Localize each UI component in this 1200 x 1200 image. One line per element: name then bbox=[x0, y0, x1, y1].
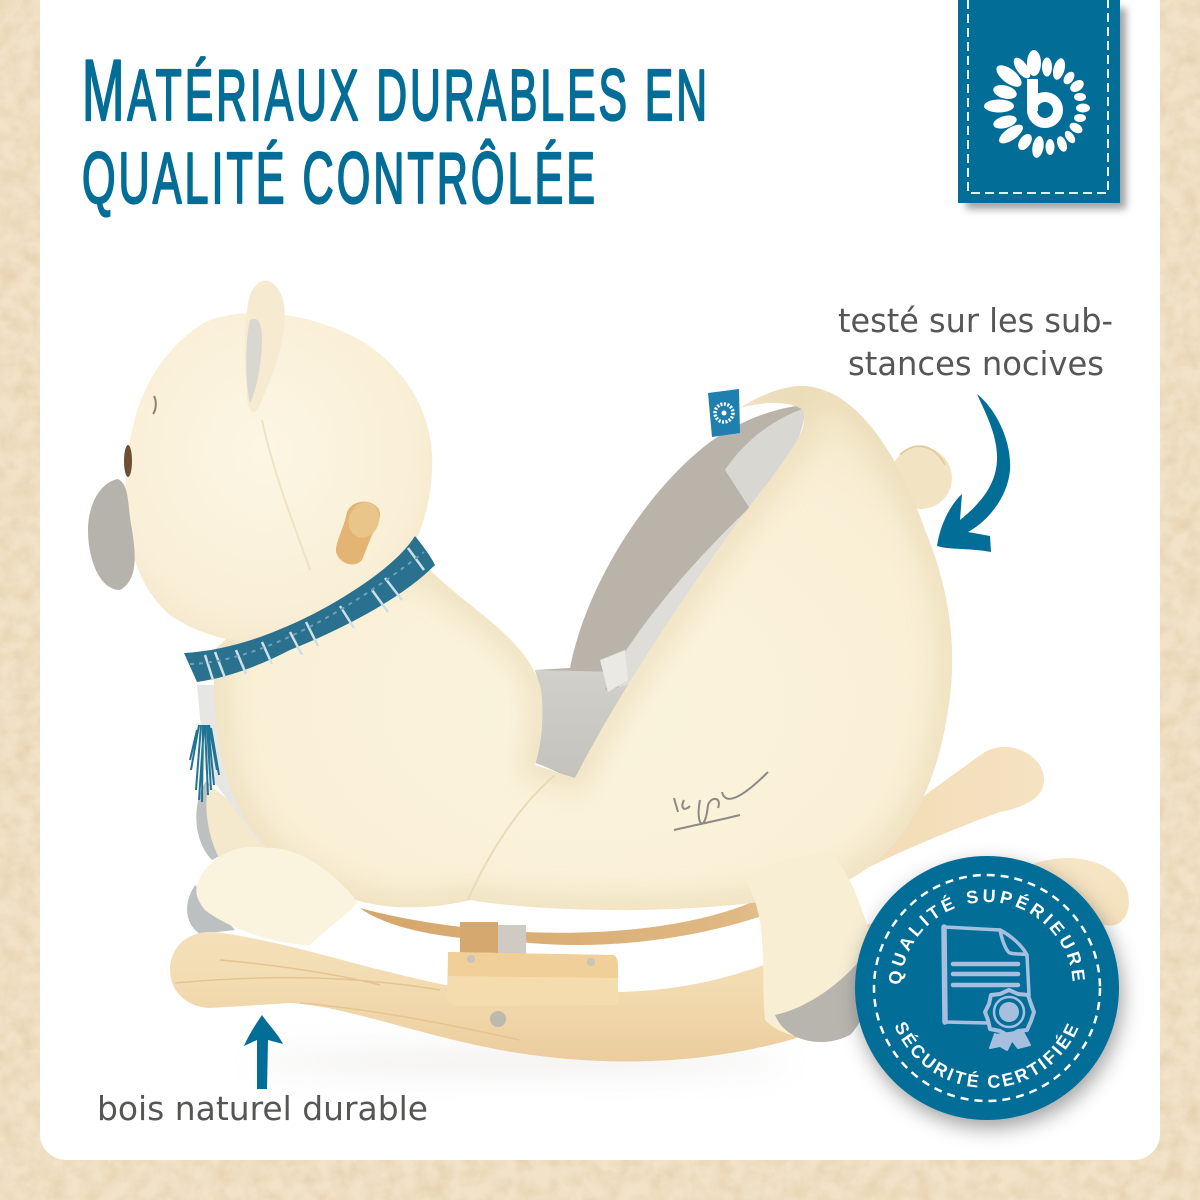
seat support plank bbox=[447, 952, 618, 1006]
title: QUALITÉ CONTRÔLÉE bbox=[82, 139, 598, 219]
tail bbox=[890, 447, 952, 509]
cream foreleg bbox=[206, 785, 280, 860]
eyebrow bbox=[153, 396, 156, 414]
title bbox=[82, 43, 710, 219]
far wooden rocker bbox=[360, 747, 1044, 945]
label: wood: bois naturel durable bbox=[97, 1089, 428, 1128]
brand tag with logo bbox=[958, 0, 1126, 209]
head bbox=[125, 313, 432, 643]
icon: certificate bbox=[944, 927, 1034, 1050]
up arrow to wood bbox=[244, 1015, 283, 1089]
signature embroidery bbox=[674, 772, 768, 830]
label: substances: testé sur les sub- bbox=[838, 301, 1113, 340]
badge text: QUALITÉ SUPÉRIEURE bbox=[889, 889, 1085, 984]
ear bbox=[245, 281, 285, 412]
scarf tassel bbox=[190, 725, 219, 802]
badge text: SÉCURITÉ CERTIFIÉE bbox=[896, 1022, 1078, 1088]
near wooden rocker bbox=[170, 858, 1129, 1061]
floor shadow bbox=[250, 1054, 790, 1070]
label: substances bbox=[838, 301, 1113, 383]
title: MATÉRIAUX DURABLES EN bbox=[82, 43, 710, 139]
light chest strip bbox=[197, 685, 275, 845]
eye bbox=[124, 445, 132, 477]
seat back inner strip bbox=[575, 505, 770, 780]
body and seat shell bbox=[214, 386, 952, 910]
seat back grey bbox=[535, 405, 805, 780]
logo: flower with letter b bbox=[984, 50, 1090, 159]
front paw bbox=[196, 847, 358, 945]
small blue label bbox=[708, 389, 740, 437]
curved arrow to toy bbox=[937, 394, 1010, 552]
icon: seal bbox=[985, 990, 1034, 1050]
back leg with grey sole bbox=[745, 855, 880, 1042]
grey hind paws bbox=[187, 780, 240, 934]
label: substances: stances nocives bbox=[848, 344, 1104, 383]
body seam bbox=[468, 775, 555, 900]
seat bottom grey bbox=[533, 670, 628, 778]
plush edge shading bbox=[214, 386, 952, 910]
rocking bear toy bbox=[88, 281, 1129, 1061]
quality badge bbox=[847, 851, 1135, 1141]
snout bbox=[88, 479, 135, 590]
badge text bbox=[889, 889, 1085, 1088]
scarf bbox=[184, 536, 435, 682]
head shading bbox=[262, 420, 310, 570]
seat strap bbox=[600, 650, 628, 692]
screw bbox=[490, 1011, 506, 1027]
wooden support post bbox=[460, 922, 498, 955]
wood grain bbox=[175, 960, 520, 1040]
wooden peg handle bbox=[336, 498, 384, 564]
seat back light panel bbox=[725, 408, 805, 512]
